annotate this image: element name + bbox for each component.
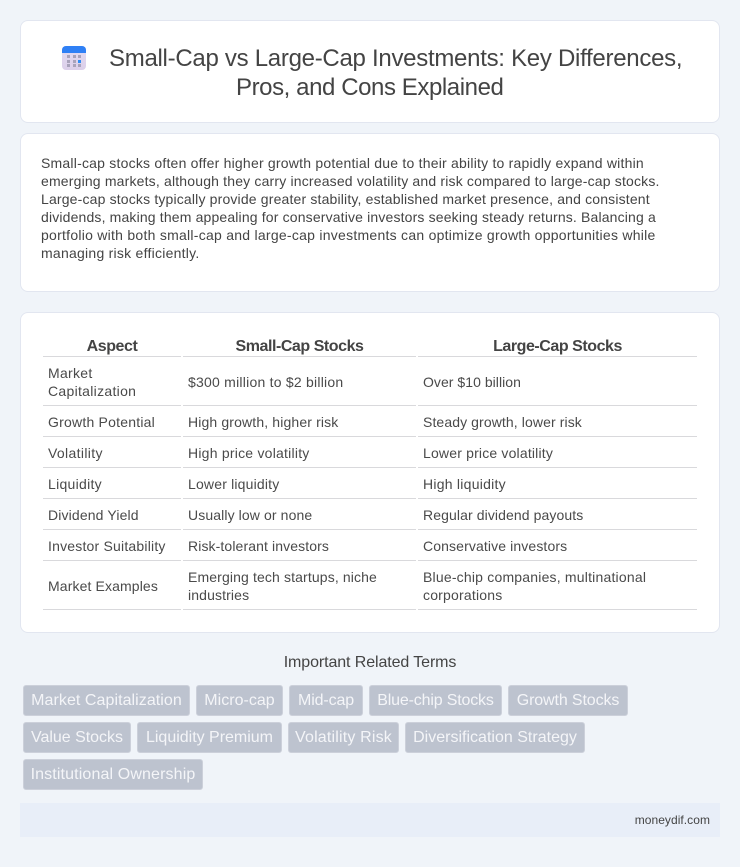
- tag: [289, 685, 363, 716]
- intro text: Large-cap stocks typically provide greater stability, established market presence, and consistent: [41, 191, 650, 207]
- related terms heading: Important Related Terms: [284, 654, 456, 671]
- table: Emerging tech startups, niche: [188, 569, 377, 585]
- header: large-cap: Large-Cap Stocks: [493, 338, 622, 355]
- panel: introduction: [20, 133, 720, 292]
- table: [43, 338, 697, 610]
- intro text: managing risk efficiently.: [41, 245, 200, 261]
- row: liquidity: Liquidity: [48, 476, 102, 492]
- title: Pros, and Cons Explained: [236, 74, 503, 101]
- tag: [369, 685, 502, 716]
- table: Over $10 billion: [423, 374, 521, 390]
- table: Blue-chip companies, multinational: [423, 569, 646, 585]
- table: corporations: [423, 587, 502, 603]
- table: $300 million to $2 billion: [188, 374, 343, 390]
- tag: Mid-cap: [298, 692, 354, 709]
- intro text: [41, 155, 660, 261]
- header: small-cap: Small-Cap Stocks: [236, 338, 363, 355]
- row: volatility: Volatility: [48, 445, 103, 461]
- header panel: [20, 20, 720, 123]
- table: Steady growth, lower risk: [423, 414, 582, 430]
- table: Regular dividend payouts: [423, 507, 583, 523]
- tag: [288, 722, 399, 753]
- header: aspect: Aspect: [87, 338, 137, 355]
- row: market capitalization: Market: [48, 365, 93, 381]
- intro text: portfolio with both small-cap and large-cap investments can optimize growth opportunities while: [41, 227, 656, 243]
- table: High growth, higher risk: [188, 414, 338, 430]
- footer source: moneydif.com: [635, 813, 710, 827]
- row: market capitalization: Capitalization: [48, 383, 136, 399]
- tag: [196, 685, 283, 716]
- row: investor suitability: Investor Suitability: [48, 538, 166, 554]
- tags: [23, 685, 628, 790]
- icon: calendar: [62, 46, 86, 70]
- footer bar: [20, 803, 720, 837]
- tag: Liquidity Premium: [146, 729, 273, 746]
- tag: Growth Stocks: [517, 692, 619, 709]
- table: Conservative investors: [423, 538, 567, 554]
- tag: [23, 759, 203, 790]
- row: growth potential: Growth Potential: [48, 414, 155, 430]
- title: [109, 45, 682, 101]
- intro text: Small-cap stocks often offer higher growth potential due to their ability to rapidly expand within: [41, 155, 644, 171]
- intro text: dividends, making them appealing for conservative investors seeking steady returns. Balancing a: [41, 209, 656, 225]
- table: Risk-tolerant investors: [188, 538, 329, 554]
- tag: Institutional Ownership: [31, 766, 195, 783]
- table: Usually low or none: [188, 507, 312, 523]
- tag: Market Capitalization: [31, 692, 182, 709]
- row: market capitalization: [48, 365, 136, 399]
- tag: [23, 722, 131, 753]
- table: High price volatility: [188, 445, 310, 461]
- row: dividend yield: Dividend Yield: [48, 507, 139, 523]
- table: High liquidity: [423, 476, 506, 492]
- tag: [508, 685, 628, 716]
- table: Lower liquidity: [188, 476, 279, 492]
- title: Small-Cap vs Large-Cap Investments: Key Differences,: [109, 45, 682, 72]
- tag: Volatility Risk: [295, 729, 392, 746]
- tag: Value Stocks: [31, 729, 123, 746]
- panel: comparison table: [20, 312, 720, 633]
- tag: Blue-chip Stocks: [377, 692, 494, 709]
- row: market examples: Market Examples: [48, 578, 158, 594]
- table: industries: [188, 587, 249, 603]
- tag: Micro-cap: [204, 692, 275, 709]
- tag: [137, 722, 282, 753]
- intro text: emerging markets, although they carry increased volatility and risk compared to large-cap stocks.: [41, 173, 660, 189]
- tag: Diversification Strategy: [413, 729, 577, 746]
- tag: [23, 685, 190, 716]
- tag: [405, 722, 585, 753]
- table: Lower price volatility: [423, 445, 553, 461]
